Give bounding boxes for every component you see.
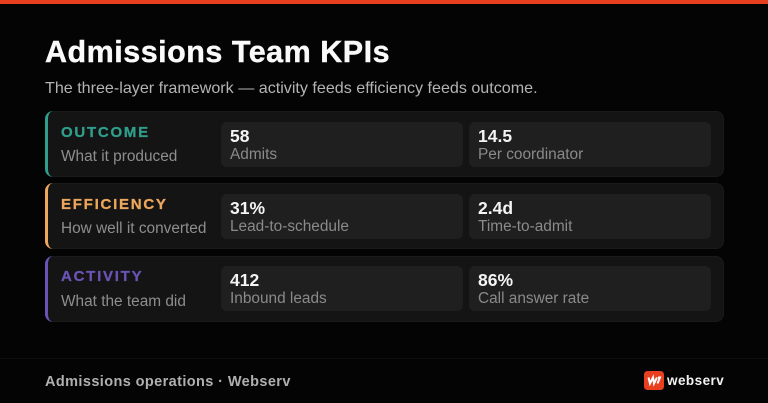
activity accent [45, 256, 55, 322]
metric: call answer rate [469, 266, 711, 311]
efficiency description: How well it converted [61, 220, 206, 237]
metric: call answer rate: 86% [478, 270, 513, 290]
footer divider [0, 358, 768, 359]
title: Admissions Team KPIs [45, 35, 390, 69]
metric: inbound leads [221, 266, 463, 311]
outcome heading: OUTCOME [61, 124, 150, 141]
logo icon [644, 371, 664, 390]
outcome description: What it produced [61, 148, 177, 165]
metric: per coordinator: 14.5 [478, 126, 512, 146]
metric: lead-to-schedule: Lead-to-schedule [230, 218, 349, 235]
metric: admits: Admits [230, 146, 277, 163]
subtitle: The three-layer framework — activity feeds efficiency feeds outcome. [45, 79, 538, 97]
metric: call answer rate: Call answer rate [478, 290, 589, 307]
metric: time-to-admit: Time-to-admit [478, 218, 572, 235]
efficiency heading: EFFICIENCY [61, 196, 168, 213]
metric: admits: 58 [230, 126, 249, 146]
panel: activity [45, 256, 724, 322]
panel: outcome [45, 111, 724, 177]
logo wordmark: webserv [667, 373, 724, 388]
metric: lead-to-schedule [221, 194, 463, 239]
metric: admits [221, 122, 463, 167]
efficiency accent [45, 183, 55, 249]
metric: inbound leads: 412 [230, 270, 259, 290]
metric: time-to-admit: 2.4d [478, 198, 513, 218]
metric: inbound leads: Inbound leads [230, 290, 327, 307]
activity heading: ACTIVITY [61, 268, 143, 285]
activity description: What the team did [61, 293, 186, 310]
metric: per coordinator: Per coordinator [478, 146, 583, 163]
outcome accent [45, 111, 55, 177]
top accent bar [0, 0, 768, 4]
metric: time-to-admit [469, 194, 711, 239]
metric: per coordinator [469, 122, 711, 167]
metric: lead-to-schedule: 31% [230, 198, 265, 218]
panel: efficiency [45, 183, 724, 249]
footer text: Admissions operations · Webserv [45, 374, 291, 390]
